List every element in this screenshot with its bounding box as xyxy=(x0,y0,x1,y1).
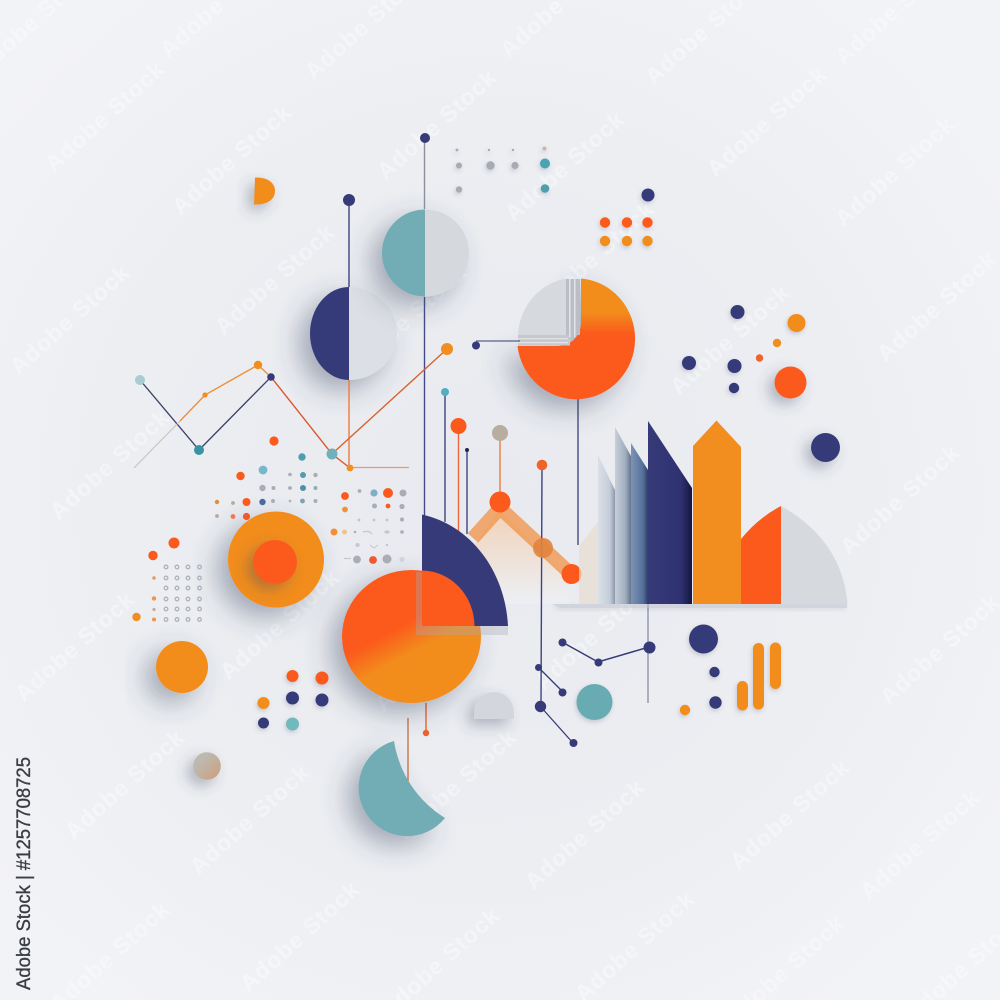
teal crescent xyxy=(359,741,445,836)
watermark pattern: Adobe Stock xyxy=(500,106,630,226)
dot grid upper middle xyxy=(215,436,318,520)
watermark pattern: Adobe Stock xyxy=(855,784,985,904)
watermark pattern: Adobe Stock xyxy=(530,574,660,694)
grey panel xyxy=(615,427,631,604)
right dot cluster xyxy=(682,305,840,462)
watermark pattern: Adobe Stock xyxy=(370,596,500,716)
watermark pattern: Adobe Stock xyxy=(725,754,855,874)
line chart xyxy=(134,343,453,471)
watermark pattern: Adobe Stock xyxy=(702,61,832,181)
vertical pin lines xyxy=(349,138,648,790)
large pie chart with navy quarter xyxy=(342,514,508,703)
pie orange segment xyxy=(518,278,635,399)
watermark pattern: Adobe Stock xyxy=(210,219,340,339)
watermark pattern: Adobe Stock xyxy=(45,404,175,524)
beige backdrop xyxy=(579,522,598,604)
grey semicircle xyxy=(474,692,514,719)
stock id vertical text: Adobe Stock | #1257708725 xyxy=(14,757,35,990)
dot grid left xyxy=(132,538,201,622)
watermark pattern: Adobe Stock xyxy=(40,56,170,176)
pie chart top xyxy=(476,278,635,399)
large orange circle with red core xyxy=(228,512,324,608)
shape shadow baseline xyxy=(552,604,847,608)
watermark pattern: Adobe Stock xyxy=(392,724,522,844)
split circle: navy and grey xyxy=(310,287,397,380)
watermark pattern: Adobe Stock xyxy=(830,111,960,231)
watermark pattern: Adobe Stock xyxy=(872,246,1000,366)
red dome part xyxy=(741,506,781,604)
orange arrow bar xyxy=(693,420,741,604)
watermark pattern: Adobe Stock xyxy=(215,564,345,684)
dot cluster bottom xyxy=(258,670,328,730)
tan circle xyxy=(193,752,221,780)
watermark pattern: Adobe Stock xyxy=(835,439,965,559)
teal circle xyxy=(576,684,612,720)
grey dome part xyxy=(781,506,848,604)
blue panel xyxy=(631,443,648,604)
navy panel xyxy=(648,421,692,604)
watermark pattern: Adobe Stock xyxy=(665,279,795,399)
watermark pattern: Adobe Stock xyxy=(372,64,502,184)
watermark pattern: Adobe Stock xyxy=(60,724,190,844)
watermark pattern: Adobe Stock xyxy=(530,196,660,316)
navy quarter xyxy=(422,514,508,626)
watermark pattern: Adobe Stock xyxy=(167,99,297,219)
watermark pattern: Adobe Stock xyxy=(185,759,315,879)
top dot grid xyxy=(456,146,550,193)
watermark pattern: Adobe Stock xyxy=(520,774,650,894)
watermark pattern: Adobe Stock xyxy=(342,259,472,379)
navy dot above grid xyxy=(642,188,654,202)
pin heads xyxy=(343,133,508,736)
bar chart shapes xyxy=(552,420,848,608)
pie connector dot xyxy=(472,342,480,350)
watermark pattern: Adobe Stock xyxy=(10,586,140,706)
quarter shadow plate xyxy=(416,572,508,635)
watermark pattern: Adobe Stock xyxy=(235,876,365,996)
dot grid centre xyxy=(330,488,406,564)
pie grey segment with stripes xyxy=(518,278,580,346)
pie connector line xyxy=(476,340,520,342)
lower right dots xyxy=(680,624,722,715)
red inner quarter xyxy=(422,570,474,626)
orange circle left xyxy=(156,641,208,693)
chevron line chart xyxy=(473,460,582,706)
icon: orange half circle xyxy=(254,177,275,205)
watermark pattern: Adobe Stock xyxy=(5,259,135,379)
mini bars xyxy=(737,642,781,710)
split circle: teal and grey xyxy=(382,210,469,296)
network nodes xyxy=(535,638,656,747)
orange six dots xyxy=(600,217,653,246)
pale panel xyxy=(598,455,615,604)
